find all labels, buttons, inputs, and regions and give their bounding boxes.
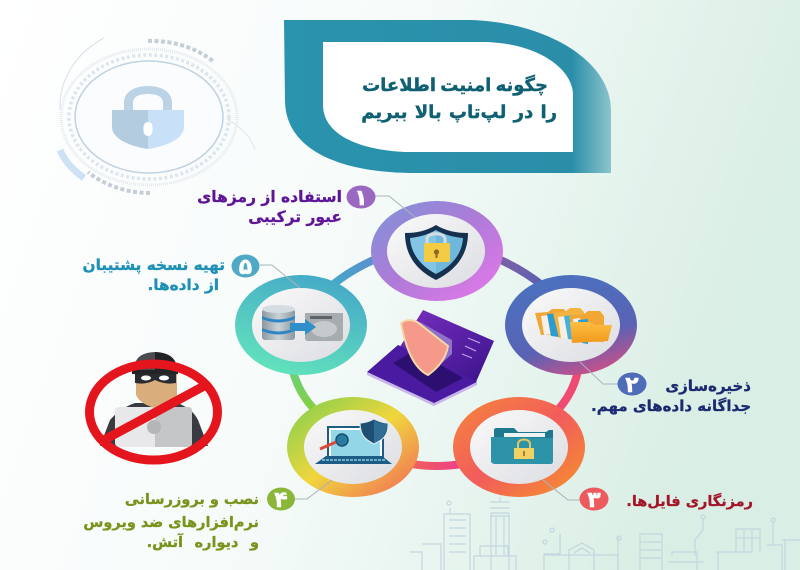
step 4 callout xyxy=(83,488,295,551)
label 4: نصب و بروزرسانی xyxy=(125,492,259,508)
title text: چگونه امنیت اطلاعات xyxy=(362,74,548,96)
icon: hacker prohibited xyxy=(90,352,218,460)
step 5 callout xyxy=(83,254,260,294)
icon: faded padlock dial xyxy=(60,38,255,193)
badge 5 xyxy=(232,254,260,280)
callout leader lines xyxy=(260,196,618,500)
label 2: جداگانه داده‌های مهم. xyxy=(591,397,751,415)
label 4: و دیواره آتش. xyxy=(147,533,259,551)
step 1 ring: shield with padlock xyxy=(371,201,503,301)
badge 3: ۳ xyxy=(587,488,601,513)
step 5 ring: database to hard drive xyxy=(235,275,367,375)
step 1 callout xyxy=(197,186,376,226)
label 1: عبور ترکیبی xyxy=(248,208,342,226)
step 2 ring: folders xyxy=(505,275,637,375)
label 3: رمزنگاری فایل‌ها. xyxy=(626,492,753,510)
step 4 ring: laptop with shield xyxy=(287,397,419,497)
label 4 xyxy=(83,492,259,551)
badge 1: ۱ xyxy=(354,186,368,211)
label 5 xyxy=(83,256,225,294)
label 5: تهیه نسخه پشتیبان xyxy=(83,256,225,275)
badge 2: ۲ xyxy=(625,373,639,398)
badge 4: ۴ xyxy=(274,488,288,513)
label 2: ذخیره‌سازی xyxy=(665,377,751,395)
title text: را در لپ‌تاپ بالا ببریم xyxy=(361,102,557,123)
step 3 ring: locked folder xyxy=(453,397,585,497)
panel: title banner xyxy=(284,20,611,173)
title text xyxy=(361,74,557,123)
badge 2 xyxy=(618,372,646,398)
label 4: نرم‌افزارهای ضد ویروس xyxy=(83,515,259,531)
label 1 xyxy=(197,188,342,226)
badge 4 xyxy=(267,488,295,513)
badge 1 xyxy=(346,186,376,211)
step 2 callout xyxy=(591,372,751,415)
step 3 callout xyxy=(580,488,753,513)
skyline illustration xyxy=(410,497,800,570)
label 2 xyxy=(591,377,751,415)
central laptop with shield xyxy=(367,310,494,406)
badge 5: ۵ xyxy=(239,255,252,280)
ring connectors xyxy=(292,258,578,466)
badge 3 xyxy=(580,488,608,513)
label 5: از داده‌ها. xyxy=(147,276,219,294)
label 1: استفاده از رمزهای xyxy=(197,188,342,206)
